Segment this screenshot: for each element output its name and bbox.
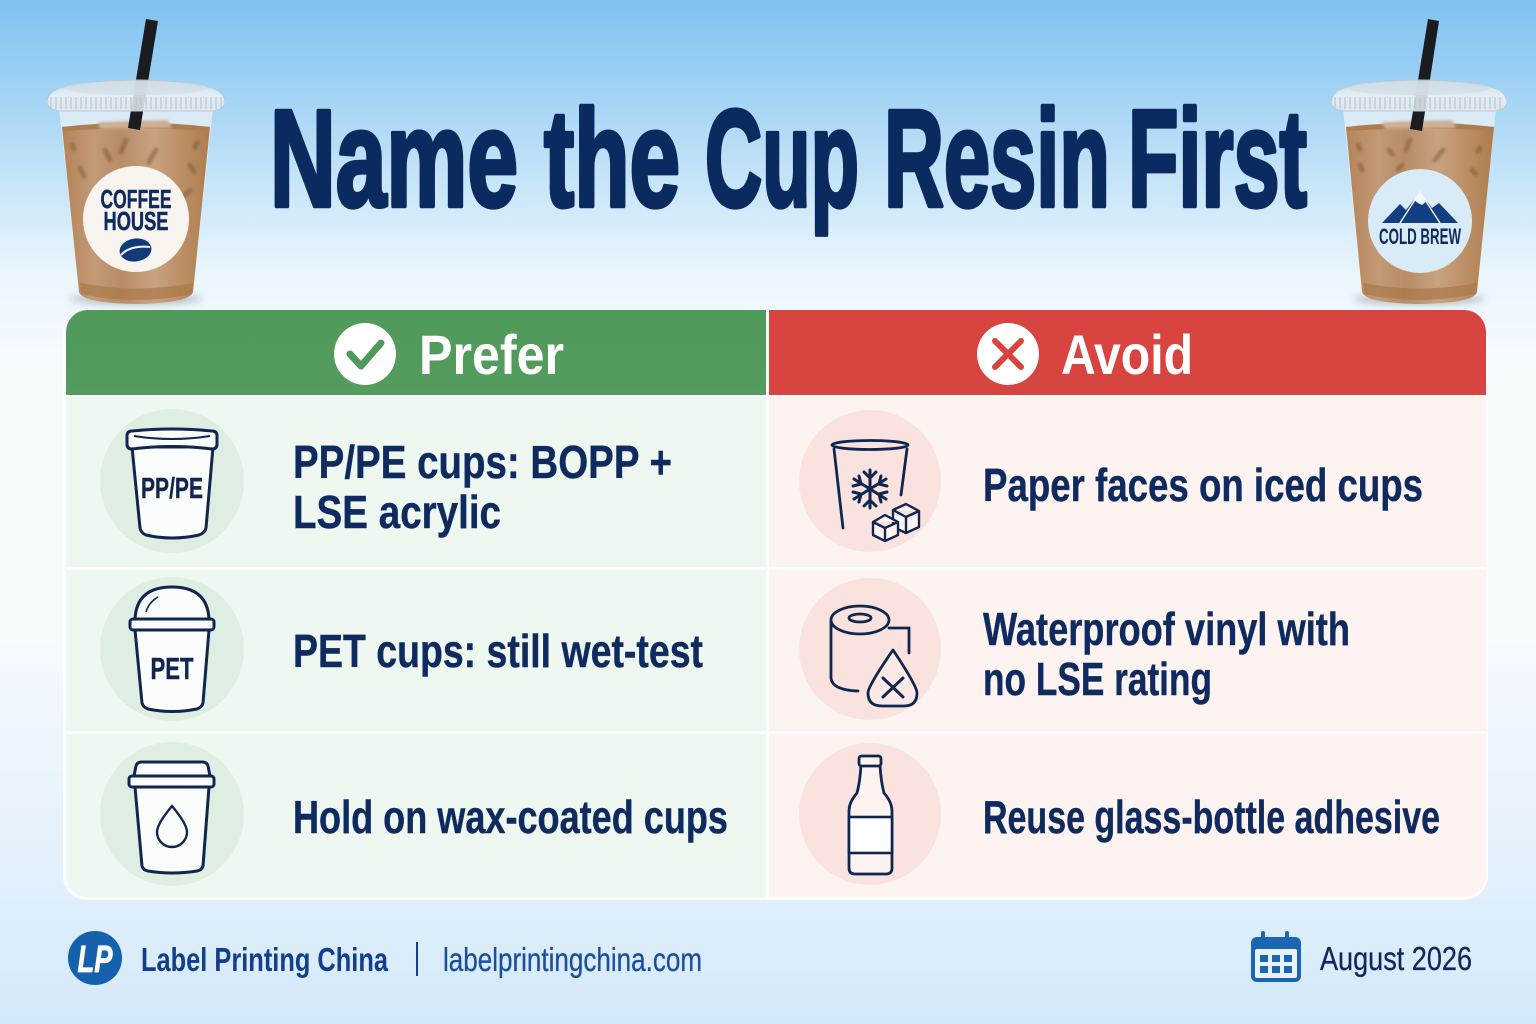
title: First	[1128, 82, 1307, 236]
text: wax-coated guidance: Hold on wax-coated cups	[293, 791, 728, 843]
icon: pp/pe cup	[100, 409, 244, 553]
icon: iced paper cup with snowflake	[799, 410, 941, 552]
heading: avoid: Avoid	[1061, 323, 1193, 386]
icon: wax-coated cup with drop	[100, 742, 244, 886]
icon: coffee house iced cup	[47, 19, 225, 304]
comparison table panel	[63, 310, 1488, 900]
text: pp/pe guidance: PP/PE cups: BOPP +	[293, 436, 672, 488]
footer: logo: LP	[78, 939, 113, 981]
footer: website: labelprintingchina.com	[443, 941, 702, 978]
icon: pet dome cup	[100, 577, 244, 721]
text: waterproof vinyl warning: no LSE rating	[983, 653, 1212, 705]
icon: glass bottle	[799, 743, 941, 885]
icon: pet dome cup: PET	[150, 651, 194, 686]
label: coffee house: HOUSE	[104, 206, 168, 236]
icon: cold brew iced cup	[1331, 19, 1507, 304]
text: pet guidance: PET cups: still wet-test	[293, 625, 703, 677]
footer: brand name: Label Printing China	[141, 941, 388, 978]
text: paper faces warning: Paper faces on iced cups	[983, 459, 1423, 511]
icon: cross mark	[977, 323, 1039, 385]
title: Name	[270, 82, 518, 236]
avoid header	[769, 310, 1486, 395]
label: coffee house: COFFEE	[100, 184, 172, 214]
icon: check mark	[334, 323, 396, 385]
title: Cup	[705, 82, 859, 236]
prefer row backgrounds	[66, 397, 766, 897]
icon: vinyl roll with crossed drop	[799, 578, 941, 720]
panel: avoid column	[769, 310, 1486, 897]
text: pp/pe guidance: LSE acrylic	[293, 486, 501, 538]
text: waterproof vinyl warning	[983, 603, 1350, 705]
footer: logo	[68, 931, 122, 985]
panel: prefer column	[66, 310, 766, 897]
title	[270, 82, 1307, 236]
label: cold brew	[1368, 169, 1472, 273]
footer: date: August 2026	[1320, 940, 1472, 977]
text: pp/pe guidance	[293, 436, 672, 538]
text: waterproof vinyl warning: Waterproof vinyl with	[983, 603, 1350, 655]
prefer header	[66, 310, 766, 395]
label: cold brew: COLD BREW	[1379, 224, 1461, 249]
label: coffee house	[83, 166, 189, 272]
title: Resin	[884, 82, 1110, 236]
icon: calendar	[1251, 933, 1301, 982]
heading: prefer: Prefer	[419, 323, 564, 386]
icon: pp/pe cup: PP/PE	[141, 473, 203, 505]
title: the	[544, 82, 680, 236]
avoid row backgrounds	[769, 397, 1486, 897]
